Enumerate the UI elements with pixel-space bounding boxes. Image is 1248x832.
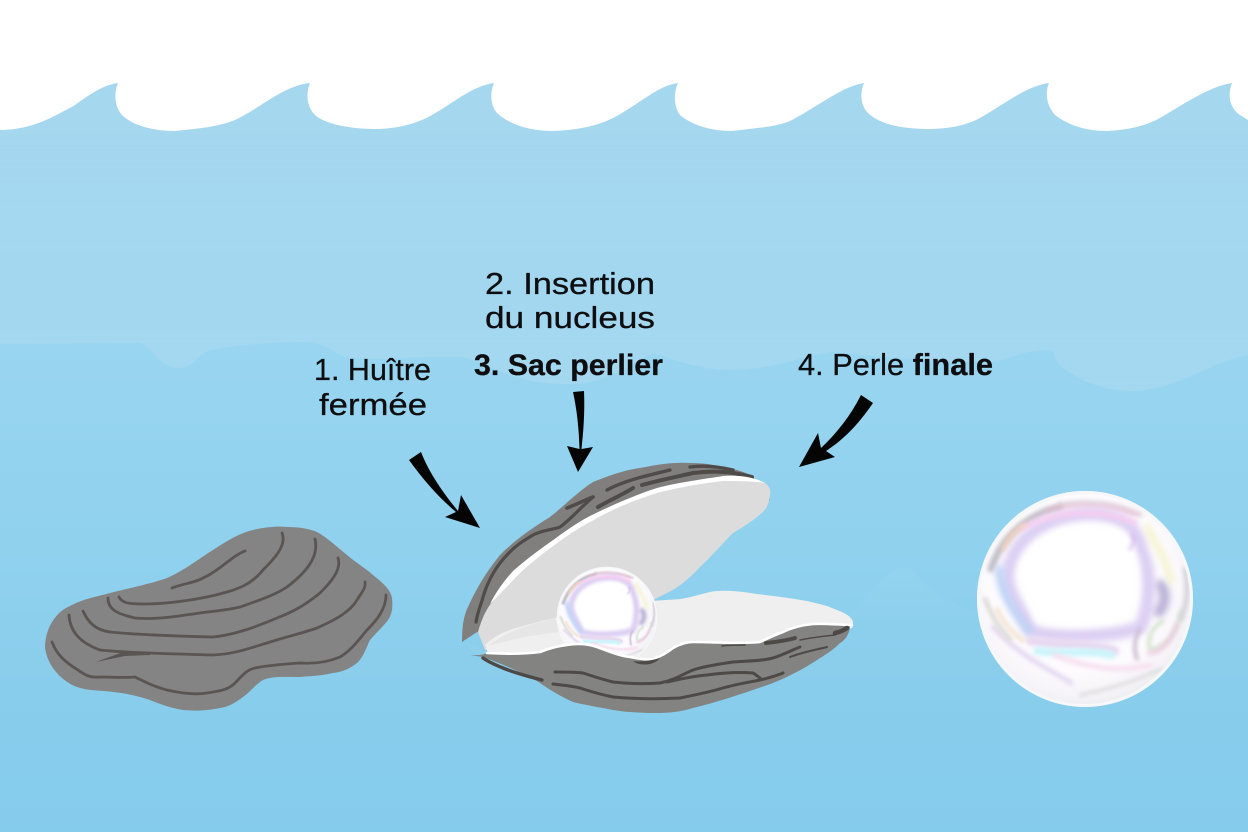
label 2: insertion du nucleus: du nucleus (485, 300, 655, 335)
label 3: sac perlier: 3. Sac perlier (474, 349, 663, 382)
label 2: insertion du nucleus (485, 266, 655, 335)
label 4: perle finale: 4. Perle finale (798, 347, 993, 382)
lower faint wave swell (840, 567, 1000, 625)
lower pearly mantle (485, 591, 853, 665)
lower water band (0, 342, 1248, 832)
upper shell pearly interior (478, 478, 770, 650)
final pearl (977, 491, 1193, 707)
arrow 3 (567, 391, 593, 472)
hinge gap (464, 640, 483, 655)
shell body (45, 527, 392, 711)
label 1: huitre fermee: fermée (319, 387, 427, 422)
label 1: huitre fermee: 1. Huître (314, 352, 431, 387)
closed oyster (45, 527, 392, 711)
label 1: huitre fermee (314, 352, 431, 422)
lower shell ridges (483, 628, 847, 699)
ridge wedge (96, 652, 150, 662)
lighter mid-water glow (0, 190, 1248, 390)
label 2: insertion du nucleus: 2. Insertion (485, 266, 655, 301)
open oyster (462, 463, 853, 713)
growth ridges (52, 533, 386, 694)
arrow 4 (799, 395, 873, 467)
lower shell exterior (470, 624, 850, 713)
upper shell white rim (490, 476, 765, 604)
lower rim (487, 624, 852, 659)
upper shell ridges (476, 466, 752, 622)
rim shadow blob (633, 658, 660, 665)
upper shell exterior (462, 463, 770, 642)
small pearl (557, 567, 657, 667)
arrow 1 (409, 452, 480, 528)
